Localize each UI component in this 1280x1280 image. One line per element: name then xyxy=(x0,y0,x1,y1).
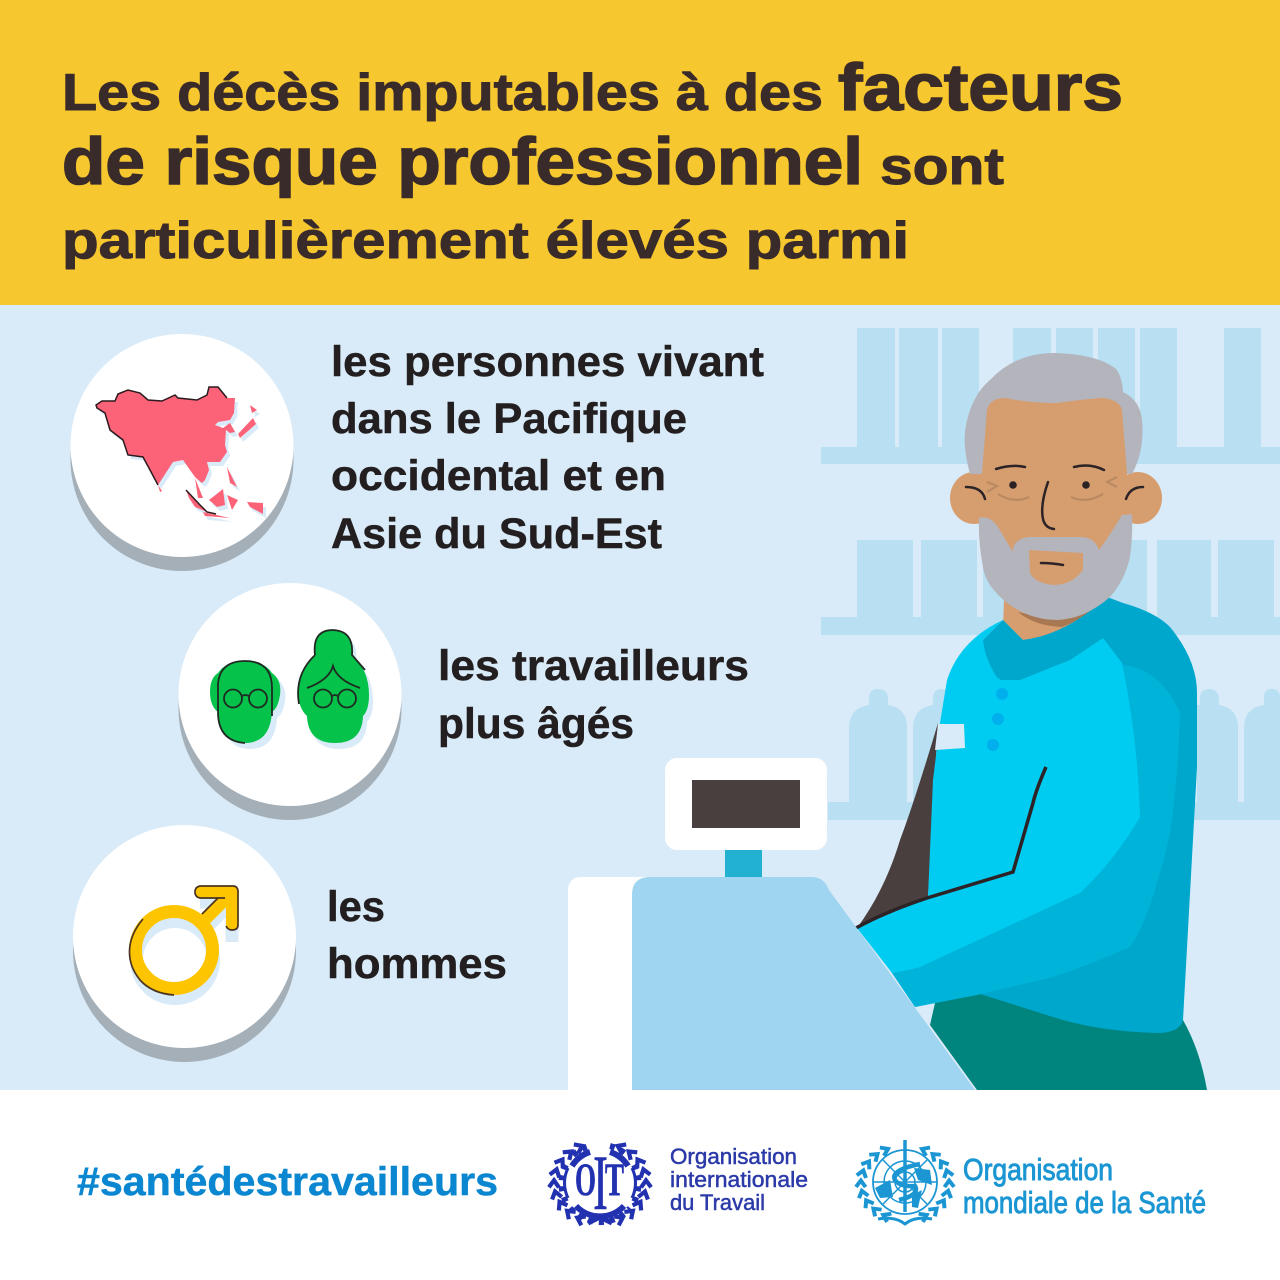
arm outline xyxy=(856,767,1046,928)
title xyxy=(62,50,1123,270)
shirt front xyxy=(857,620,1140,973)
hashtag: #santédestravailleurs xyxy=(77,1160,498,1204)
icon: Asia map circle xyxy=(70,334,294,571)
icon: older workers circle xyxy=(178,583,402,820)
shirt back xyxy=(890,597,1197,1033)
text: older workers: les travailleurs xyxy=(438,642,749,690)
panel: yellow title banner xyxy=(0,0,1280,305)
text: men xyxy=(327,883,507,988)
wrinkles xyxy=(987,477,1117,500)
title: sont xyxy=(880,138,1004,196)
background pharmacy shelves xyxy=(821,328,1280,820)
logo: WHO emblem xyxy=(856,1140,954,1224)
icon: male symbol circle xyxy=(73,825,296,1062)
text: ILO name: internationale xyxy=(670,1167,808,1192)
ILO letters: T xyxy=(605,1154,624,1206)
text: Western Pacific and South-East Asia: occidental et en xyxy=(331,452,666,500)
hair xyxy=(965,353,1143,474)
title: facteurs xyxy=(838,50,1123,124)
text: WHO name xyxy=(963,1152,1206,1220)
text: Western Pacific and South-East Asia xyxy=(331,338,764,558)
text: Western Pacific and South-East Asia: les personnes vivant xyxy=(331,338,764,386)
text: ILO name xyxy=(670,1144,808,1215)
illustration: pharmacist xyxy=(856,353,1207,1090)
shirt mid shade xyxy=(892,665,1180,1007)
illustration: cash register xyxy=(568,758,975,1090)
chin xyxy=(1029,550,1083,585)
undershirt dark xyxy=(857,723,938,928)
face xyxy=(980,398,1132,600)
text: older workers: plus âgés xyxy=(438,700,634,748)
beard xyxy=(979,514,1132,620)
facial lines xyxy=(966,466,1143,565)
older man xyxy=(210,661,285,749)
logo: ILO emblem xyxy=(549,1139,651,1226)
title: particulièrement élevés parmi xyxy=(62,212,909,270)
text: Western Pacific and South-East Asia: dans le Pacifique xyxy=(331,395,687,443)
map of Western Pacific and South-East Asia xyxy=(96,387,263,518)
text: men: hommes xyxy=(327,940,507,988)
collar xyxy=(983,597,1122,680)
title: Les décès imputables à des xyxy=(62,64,823,122)
trousers xyxy=(930,993,1207,1090)
text: Western Pacific and South-East Asia: Asie du Sud-Est xyxy=(331,510,662,558)
older woman xyxy=(298,630,373,749)
ILO letters: I xyxy=(593,1139,608,1226)
title: de risque professionnel xyxy=(62,124,863,198)
ILO letters: O xyxy=(575,1154,596,1206)
name badge xyxy=(935,724,965,750)
ILO letters xyxy=(575,1139,624,1226)
text: ILO name: Organisation xyxy=(670,1144,797,1169)
ears xyxy=(950,472,1162,524)
text: WHO name: mondiale de la Santé xyxy=(963,1185,1206,1220)
neck xyxy=(1003,600,1095,640)
eyes xyxy=(1009,481,1090,489)
text: men: les xyxy=(327,883,385,931)
text: older workers xyxy=(438,642,749,748)
text: ILO name: du Travail xyxy=(670,1190,765,1215)
shirt buttons xyxy=(987,688,1008,751)
text: WHO name: Organisation xyxy=(963,1152,1113,1187)
map shadow xyxy=(99,391,266,522)
